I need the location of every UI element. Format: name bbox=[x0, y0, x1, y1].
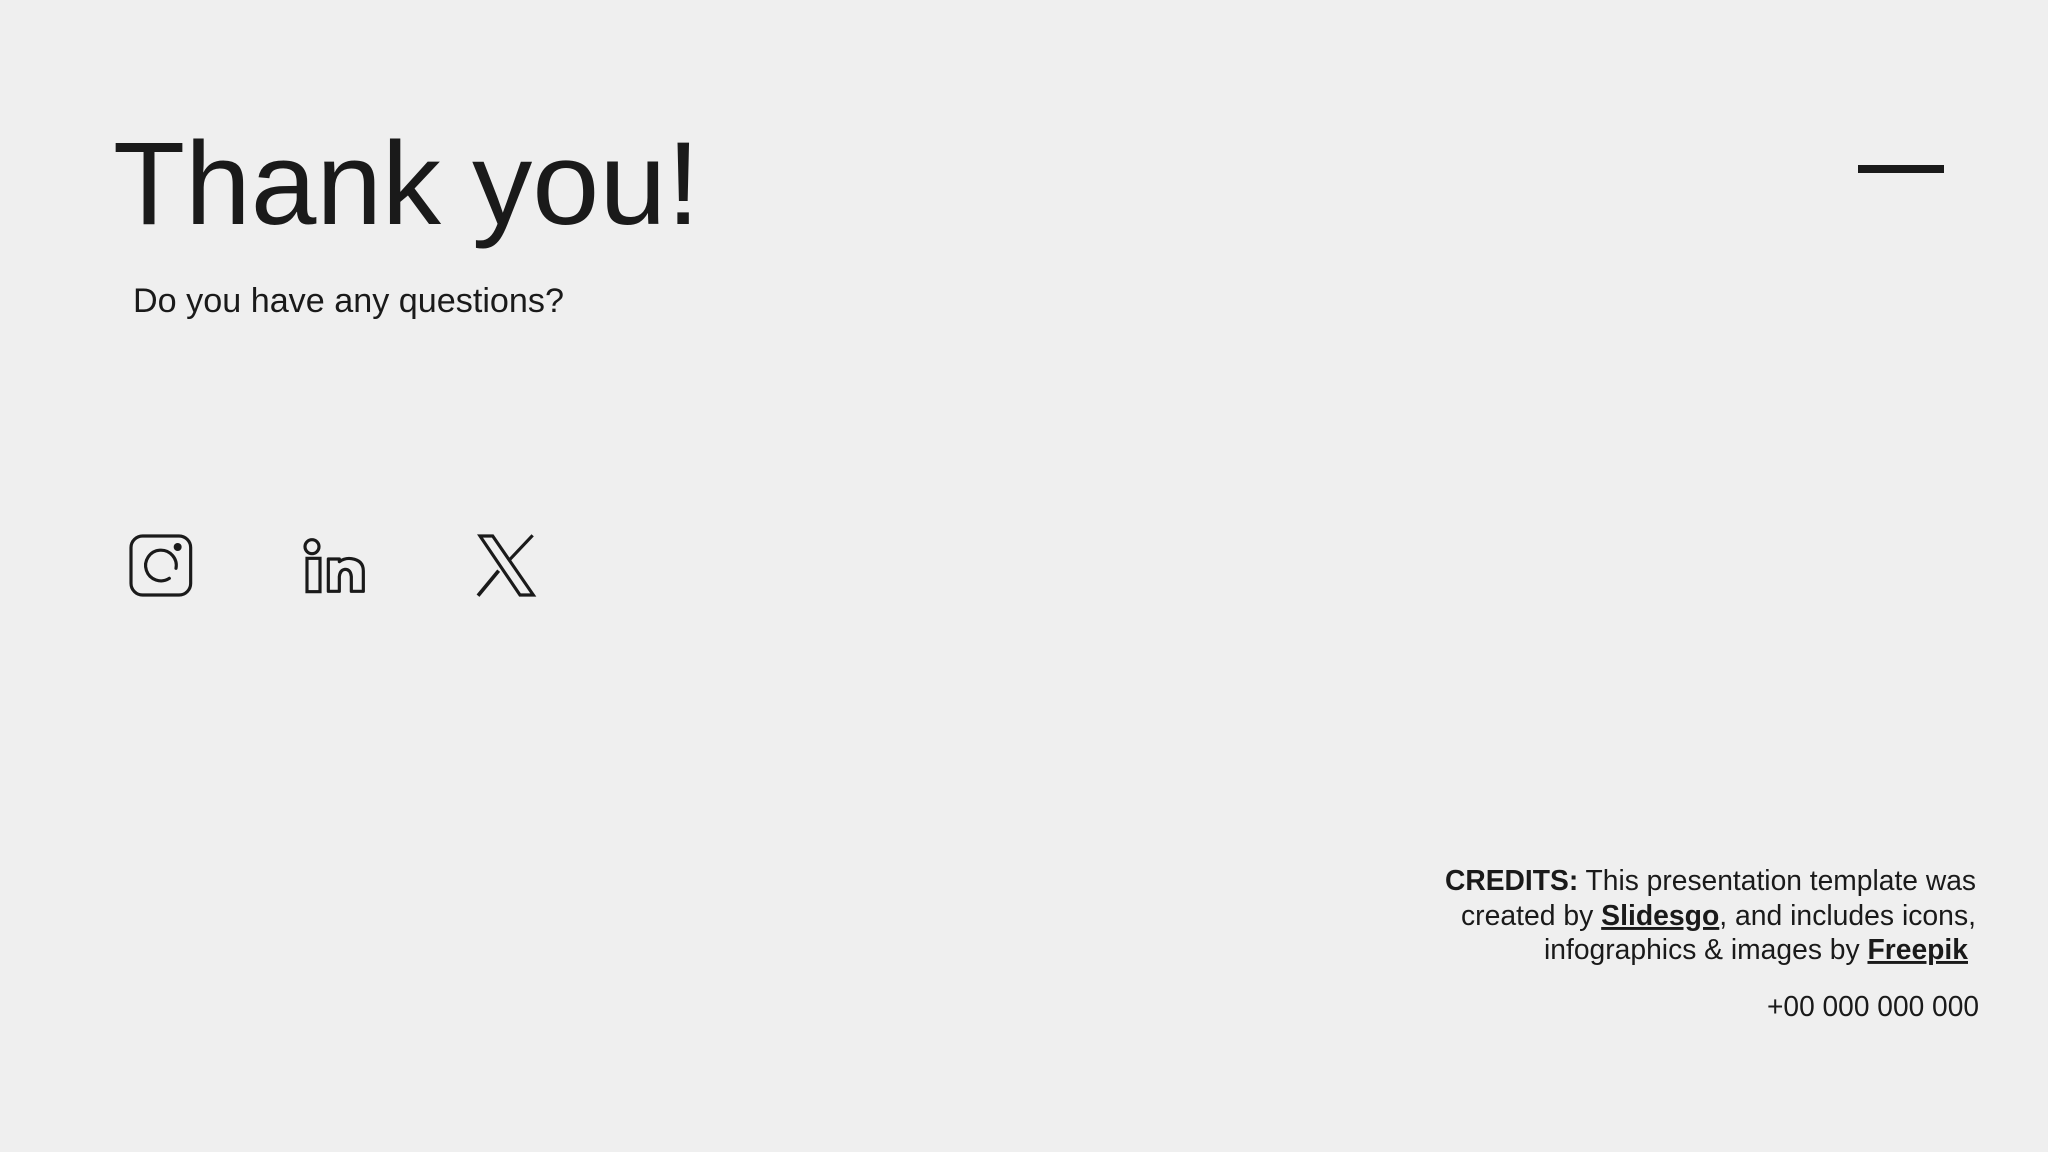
credits line 2: created by Slidesgo, and includes icons, bbox=[1461, 900, 1976, 932]
subtitle: Do you have any questions? bbox=[133, 282, 564, 320]
icon: linkedin bbox=[305, 540, 363, 592]
title: you! bbox=[472, 118, 700, 250]
icon: x bbox=[478, 535, 533, 596]
icon: instagram bbox=[131, 536, 191, 595]
title bbox=[113, 118, 700, 250]
credits line 1: CREDITS: This presentation template was bbox=[1445, 865, 1976, 897]
credits bbox=[1445, 865, 1976, 966]
title: Thank bbox=[113, 118, 442, 250]
phone number: +00 000 000 000 bbox=[1767, 991, 1979, 1023]
icon: dash menu bbox=[1858, 165, 1944, 173]
social icons bbox=[131, 535, 533, 596]
credits line 3: infographics & images by Freepik bbox=[1544, 934, 1969, 966]
